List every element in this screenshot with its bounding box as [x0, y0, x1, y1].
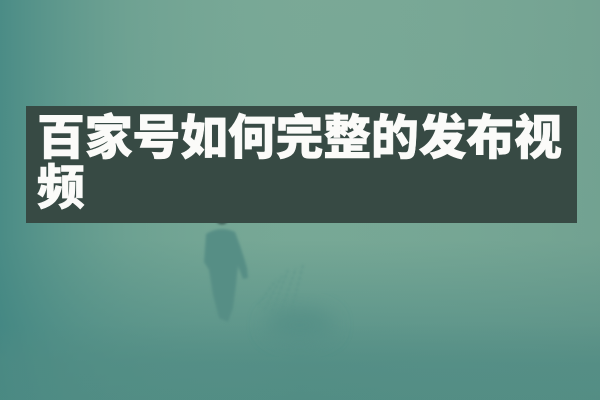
grass tuft — [258, 265, 303, 315]
title banner — [26, 106, 577, 223]
title: 百家号如何完整的发布视频 — [37, 112, 562, 215]
silhouette: walking person — [204, 212, 248, 322]
